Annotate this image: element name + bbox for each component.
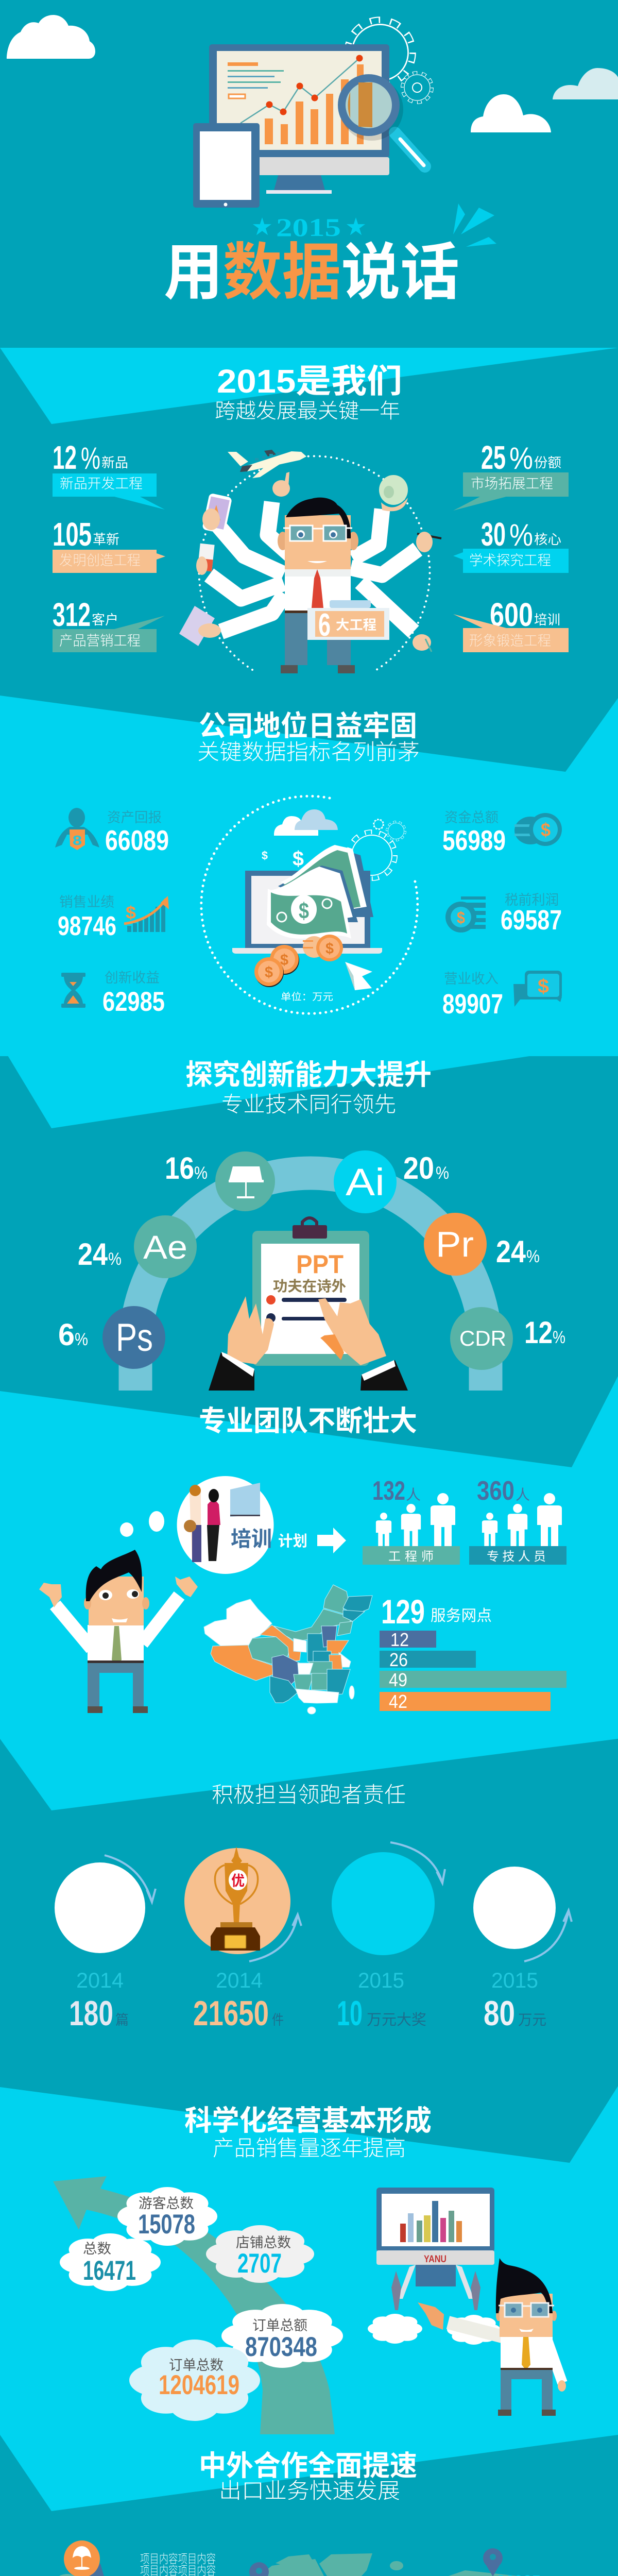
skill: Ae: 24 — [78, 1237, 108, 1272]
stat: sales: 销售业绩 — [59, 894, 114, 910]
stat: total funds: 56989 — [442, 824, 506, 856]
cloud: stores — [206, 2225, 314, 2283]
stat: 132 engineers: 132 — [372, 1476, 405, 1506]
subheading: 跨越发展最关键一年 — [215, 400, 400, 422]
circle 2 with trophy — [184, 1846, 290, 1954]
stat: 600 training: 600 — [490, 596, 533, 633]
callout: image building project: 形象锻造工程 — [469, 633, 551, 649]
training plan label: 计划 — [278, 1533, 307, 1550]
callout: new product project: 新品开发工程 — [60, 476, 143, 492]
stat: 25% share — [481, 439, 561, 476]
unit note: 单位：万元 — [281, 991, 333, 1003]
streamers from icons to plane — [65, 2564, 232, 2576]
skill: Ae — [78, 1215, 197, 1278]
stat: 80 amount: 80 — [484, 1994, 515, 2033]
heading: 科学化经营基本形成 — [184, 2105, 432, 2137]
heading: 探究创新能力大提升 — [185, 1059, 432, 1091]
skill: Ps: 6 — [58, 1317, 75, 1352]
stat: 129 service points: 129 — [381, 1592, 425, 1631]
skill: CDR: % — [553, 1328, 565, 1347]
stat: 30% core — [481, 516, 561, 553]
stat: 30% core: 30 — [481, 516, 506, 553]
stat: pre-tax profit — [501, 892, 562, 936]
stat: 12% new products — [53, 439, 128, 476]
thought bubble — [120, 1476, 274, 1574]
body text — [140, 2552, 216, 2576]
stat: operating income: 89907 — [442, 989, 503, 1020]
bar chart: 12 — [390, 1629, 409, 1650]
skill: Ai: Ai — [346, 1161, 385, 1204]
stat: 360 technicians: 专技人员 — [487, 1550, 546, 1564]
stat: 132 engineers: 工程师 — [388, 1550, 434, 1564]
cloud: order count: 1204619 — [159, 2370, 239, 2400]
stat: operating income — [442, 971, 503, 1020]
world map — [229, 2553, 565, 2576]
cloud: order count — [129, 2340, 260, 2421]
heading: 中外合作全面提速 — [199, 2450, 417, 2482]
presentation monitor robot — [368, 2188, 501, 2345]
circle 4 — [473, 1867, 556, 1949]
stat: 12% new products: % — [81, 441, 100, 476]
stat: 80 amount — [484, 1994, 546, 2033]
panel: innovation skills — [58, 1059, 565, 1391]
hands holding clipboard — [209, 1296, 408, 1391]
panel: international cooperation — [52, 2450, 565, 2576]
body text: 项目内容项目内容 — [140, 2552, 216, 2566]
clipboard — [252, 1218, 369, 1366]
skill: Ae: % — [108, 1249, 122, 1269]
thought bubble: 培训 — [231, 1527, 272, 1551]
stat: 10 award — [337, 1994, 426, 2033]
icon: rising arrow: $ — [126, 903, 136, 923]
illustration: laptop with money — [232, 809, 405, 990]
heading: 2015是我们 — [217, 363, 402, 400]
skill: Pr: 24 — [496, 1234, 526, 1269]
stat: 600 training: 培训 — [534, 612, 560, 628]
stat: innovation income — [102, 970, 165, 1017]
cloud: total: 总数 — [83, 2241, 111, 2257]
stat: innovation income: 创新收益 — [105, 970, 160, 986]
callout: image building project — [453, 614, 569, 652]
callout: invention project — [53, 550, 165, 573]
subheading: 专业技术同行领先 — [221, 1092, 396, 1116]
skill: Ai: 20 — [403, 1151, 434, 1185]
skill: Ps — [58, 1306, 165, 1369]
dotted circle — [201, 796, 418, 1013]
map of China — [204, 1585, 372, 1714]
clipboard: PPT — [296, 1250, 344, 1279]
illustration: laptop with money: $ — [293, 848, 304, 870]
stat: 180 papers: 篇 — [115, 2012, 129, 2028]
map pins — [249, 2548, 516, 2576]
skill: Ae: Ae — [143, 1229, 187, 1266]
cloud: order value — [221, 2304, 343, 2368]
stat: 30% core: 核心 — [534, 532, 561, 547]
cloud: order value: 870348 — [245, 2332, 317, 2362]
stat: 10 award: 10 — [337, 1994, 363, 2033]
panel: growing team — [39, 1405, 566, 1714]
icon: umbrella — [64, 2540, 100, 2576]
illustration: laptop with money: $ — [325, 940, 334, 957]
stat: innovation income: 62985 — [102, 987, 165, 1017]
stat: 360 technicians — [469, 1476, 566, 1565]
skill: Keynote icon — [165, 1151, 275, 1211]
stat: 360 technicians: 人 — [516, 1487, 530, 1503]
illustration: cheering man — [39, 1550, 198, 1713]
stat: 21650 items: 件 — [272, 2012, 284, 2028]
clipboard: 功夫在诗外 — [273, 1278, 346, 1294]
bar chart: 26 — [389, 1649, 408, 1670]
year labels: 2015 — [491, 1968, 538, 1992]
icon: coins: $ — [541, 819, 551, 840]
callout: new product project — [53, 473, 165, 510]
subheading: 积极担当领跑者责任 — [212, 1783, 406, 1807]
year labels: 2014 — [76, 1968, 124, 1992]
skill: Ps: Ps — [116, 1316, 153, 1360]
skill: CDR: CDR — [459, 1326, 506, 1350]
year labels: 2014 — [216, 1968, 263, 1992]
stat: 105 innovations: 革新 — [93, 532, 119, 547]
icon: superhero — [55, 808, 99, 850]
callout: market expansion project: 市场拓展工程 — [471, 476, 553, 492]
stat: 312 customers: 312 — [53, 596, 91, 633]
subheading: 关键数据指标名列前茅 — [197, 740, 420, 764]
arrow — [317, 1528, 346, 1553]
skill: CDR — [450, 1307, 565, 1370]
illustration: multi-armed businessman: 大工程 — [336, 617, 376, 633]
skill: Ps: % — [75, 1330, 88, 1349]
dotted orbit — [199, 456, 430, 670]
stat: 25% share: 25 — [481, 439, 506, 476]
heading: 专业团队不断壮大 — [199, 1405, 417, 1437]
year labels — [76, 1968, 538, 1992]
callout: academic research project: 学术探究工程 — [469, 553, 551, 568]
skill: Keynote icon: % — [194, 1163, 208, 1183]
stat: 25% share: 份额 — [534, 455, 561, 470]
stat: 21650 items: 21650 — [193, 1994, 269, 2033]
icon: airplane — [228, 450, 306, 478]
main title: 用数据说话 — [164, 238, 459, 307]
cloud: total — [60, 2233, 161, 2291]
icon: coin stack: $ — [457, 908, 465, 927]
illustration: multi-armed businessman: 6 — [318, 607, 331, 643]
decorative darts beside title — [453, 204, 496, 247]
stat: pre-tax profit: 税前利润 — [505, 892, 559, 908]
stat: 132 engineers: 人 — [406, 1487, 421, 1503]
icon: coin stack — [445, 896, 486, 933]
icon: speech bubbles: $ — [538, 976, 549, 997]
icon: superhero: 8 — [73, 833, 82, 848]
illustration: presenter — [418, 2258, 566, 2416]
icon: speech bubbles — [513, 971, 562, 1007]
bar chart — [380, 1629, 566, 1712]
growth arrow — [53, 2176, 335, 2434]
stat: 129 service points — [381, 1592, 492, 1631]
skill: Keynote icon: 16 — [165, 1151, 194, 1185]
icon: drink — [52, 2574, 82, 2576]
icon: coins — [514, 813, 562, 846]
stat: total funds — [442, 810, 506, 856]
stat: return on assets: 66089 — [105, 824, 169, 856]
skill: Pr — [424, 1213, 540, 1276]
illustration: multi-armed businessman — [179, 472, 441, 673]
cloud: total: 16471 — [83, 2256, 136, 2286]
skill: Ai — [334, 1150, 449, 1213]
illustration: laptop with money: $ — [280, 952, 288, 969]
bar chart: 49 — [389, 1669, 407, 1690]
cloud: stores: 店铺总数 — [236, 2235, 291, 2250]
arch — [135, 1173, 486, 1391]
subheading: 产品销售量逐年提高 — [213, 2136, 406, 2160]
callout: marketing project — [53, 616, 165, 652]
skill: Pr: Pr — [436, 1224, 474, 1264]
cover hero: monitor, clouds, magnifier, tablet: 2015 — [276, 213, 341, 242]
curved arrows — [105, 1842, 572, 1961]
callout: market expansion project — [453, 472, 569, 511]
skill: Ai: % — [436, 1163, 449, 1183]
illustration: laptop with money: $ — [265, 964, 273, 981]
heading: 公司地位日益牢固 — [199, 710, 417, 742]
panel: company position — [55, 710, 562, 1020]
stat: sales: 98746 — [58, 911, 116, 941]
callout: invention project: 发明创造工程 — [59, 553, 141, 568]
stat: 132 engineers — [363, 1476, 460, 1565]
panel: social responsibility — [55, 1783, 572, 2033]
cloud: visitors: 15078 — [138, 2209, 195, 2240]
illustration: laptop with money: $ — [299, 899, 309, 924]
cloud: order count: 订单总数 — [169, 2358, 224, 2373]
presentation monitor robot: YANU — [424, 2254, 447, 2265]
subheading: 出口业务快速发展 — [219, 2479, 400, 2503]
stat: 129 service points: 服务网点 — [431, 1607, 492, 1624]
stat: return on assets — [105, 810, 169, 856]
icon: hourglass — [61, 973, 85, 1008]
skill: Pr: % — [526, 1247, 540, 1266]
skill: CDR: 12 — [524, 1315, 553, 1350]
illustration: laptop with money: $ — [262, 849, 268, 862]
stat: sales — [58, 894, 116, 941]
circle 1 — [55, 1862, 145, 1953]
cloud: visitors: 游客总数 — [139, 2196, 194, 2211]
circle 2 with trophy: 优 — [231, 1873, 245, 1889]
stat: 180 papers: 180 — [69, 1994, 113, 2033]
callout: academic research project — [453, 549, 569, 573]
stat: 25% share: % — [509, 441, 533, 476]
year labels: 2015 — [358, 1968, 404, 1992]
cloud: order value: 订单总额 — [252, 2318, 307, 2333]
stat: return on assets: 资产回报 — [107, 810, 162, 825]
cloud: visitors — [117, 2187, 217, 2246]
stat: 30% core: % — [509, 518, 533, 552]
icon: rising arrow — [124, 896, 169, 932]
stat: total funds: 资金总额 — [444, 810, 499, 825]
cloud: stores: 2707 — [237, 2248, 282, 2279]
pin holes — [256, 2554, 509, 2576]
stat: 80 amount: 万元 — [518, 2012, 546, 2028]
bar chart: 42 — [389, 1691, 407, 1712]
stat: pre-tax profit: 69587 — [501, 905, 562, 936]
stat: 105 innovations: 105 — [53, 516, 92, 553]
stat: 12% new products: 12 — [53, 439, 77, 476]
cover hero: monitor, clouds, magnifier, tablet — [7, 15, 618, 242]
panel: scientific operations — [53, 2105, 566, 2434]
callout: marketing project: 产品营销工程 — [59, 633, 141, 649]
stat: 12% new products: 新品 — [101, 455, 128, 470]
panel: 2015 six projects — [53, 363, 569, 673]
stat: 312 customers: 客户 — [92, 612, 118, 628]
stat: 10 award: 万元大奖 — [367, 2011, 426, 2028]
stat: operating income: 营业收入 — [444, 971, 499, 987]
circle 3 — [332, 1852, 435, 1955]
stat: 360 technicians: 360 — [477, 1476, 514, 1506]
